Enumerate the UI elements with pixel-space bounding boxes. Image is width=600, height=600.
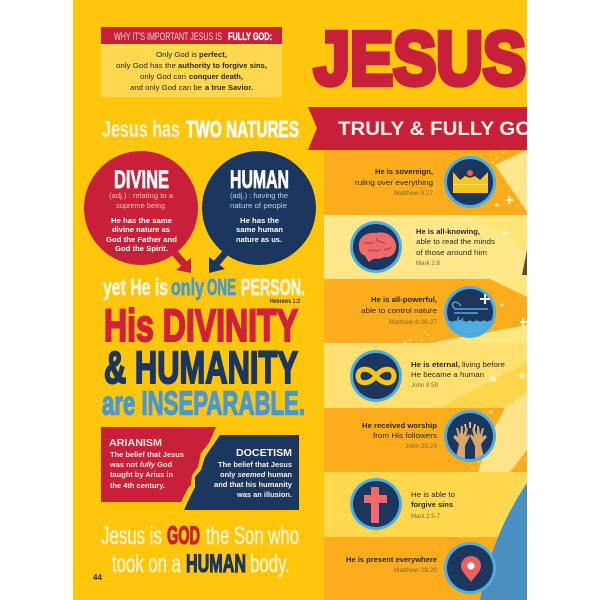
closing statement: HUMAN <box>186 550 246 578</box>
icon: brain <box>350 221 402 273</box>
icon: wind and waves <box>444 286 496 340</box>
text: sovereign: Matthew 9:27 <box>394 190 433 197</box>
panel: divine: supreme being <box>116 201 165 210</box>
panel: human: He has the <box>240 216 279 225</box>
text: all-knowing: Mark 2:8 <box>416 260 440 267</box>
item: all-powerful <box>361 286 496 340</box>
heading: are inseparable: are INSEPARABLE. <box>102 384 305 422</box>
closing statement <box>101 522 299 578</box>
closing statement: the Son who <box>206 522 299 550</box>
panel: docetism: and that his humanity <box>214 480 293 489</box>
page number: 44 <box>93 573 102 582</box>
heading: and humanity: & HUMANITY <box>104 342 298 393</box>
panel: divine: DIVINE <box>114 166 169 194</box>
item: worship <box>362 410 496 462</box>
panel: docetism: only seemed human <box>220 470 292 479</box>
heading: why it's important <box>114 32 272 40</box>
text: reasons: authority to forgive sins, <box>178 61 267 70</box>
icon: cross <box>350 478 402 530</box>
text: eternal: living before <box>462 360 505 369</box>
closing statement: took on a <box>112 550 181 578</box>
text: forgive: forgive sins <box>411 500 453 509</box>
text: reasons: a true Savior. <box>205 83 253 92</box>
heading: two natures <box>102 120 299 138</box>
text: worship: John 20:28 <box>405 443 437 450</box>
text: worship <box>362 422 437 448</box>
icon: map pin <box>444 542 496 594</box>
text: all-knowing <box>416 227 495 267</box>
panel: human: (adj.) : having the <box>230 191 288 200</box>
closing statement: Jesus is <box>101 522 162 550</box>
icon: infinity <box>350 350 402 402</box>
banner: truly and fully god <box>308 107 546 150</box>
text: all-knowing: able to read the minds <box>416 237 495 246</box>
text: sovereign <box>356 168 433 195</box>
blue curved shape <box>480 483 527 600</box>
heading: one person: ONE <box>207 274 236 300</box>
panel: arianism: was not fully God <box>109 460 172 469</box>
heading: one person: only <box>171 274 204 300</box>
text: eternal: John 8:58 <box>411 382 438 389</box>
panel: divine <box>84 151 198 273</box>
panel: divine: He has the same <box>111 216 172 225</box>
banner: truly and fully god: TRULY & FULLY GOD <box>338 119 546 140</box>
heading: his divinity: His DIVINITY <box>104 300 298 351</box>
text: forgive: Mark 2:5-7 <box>411 513 440 520</box>
text: forgive: He is able to <box>411 490 455 499</box>
panel: human: HUMAN <box>230 166 289 194</box>
panel: docetism: The belief that Jesus <box>218 460 292 469</box>
text: eternal: He is eternal, <box>411 360 460 369</box>
panel: arianism: ARIANISM <box>109 438 162 449</box>
closing statement: GOD <box>167 522 200 550</box>
text: reasons: only God has the <box>116 61 176 70</box>
panel: striped background bands <box>324 150 527 600</box>
panel: why it's important <box>101 27 282 97</box>
panel: arianism: The belief that Jesus <box>110 450 184 459</box>
text: present: He is present everywhere <box>346 555 437 564</box>
panel: divine: divine nature as <box>112 225 170 234</box>
text: present: Matthew 28:20 <box>394 567 437 574</box>
heading: why it's important: WHY IT'S IMPORTANT JESUS IS <box>114 31 222 43</box>
item: forgive <box>350 478 455 530</box>
text: reasons: perfect, <box>199 50 227 59</box>
panel: human <box>202 151 316 273</box>
heading: why it's important: FULLY GOD: <box>228 31 272 43</box>
panel: divine: (adj.) : relating to a <box>109 191 174 200</box>
text: all-knowing: of those around him <box>416 248 487 257</box>
text: eternal <box>411 362 505 387</box>
text: reasons: and only God can be <box>130 83 202 92</box>
panel: arianism <box>101 427 216 502</box>
item: sovereign <box>355 156 496 208</box>
panel: human: nature as us. <box>236 235 282 244</box>
text: all-powerful: able to control nature <box>361 306 437 315</box>
speckle texture <box>404 152 517 471</box>
reference: Hebrews: Hebrews 1:3 <box>270 299 301 305</box>
panel: docetism <box>184 435 299 510</box>
panel: divine: God the Father and <box>106 235 177 244</box>
heading: one person: yet He is <box>103 274 168 300</box>
icon: raised hands <box>444 410 496 462</box>
text: eternal: He became a human <box>411 370 484 379</box>
panel: human: nature of people <box>230 201 287 210</box>
text: reasons: conquer death, <box>189 72 243 81</box>
page background <box>73 0 546 600</box>
text: all-powerful: Matthew 8:26-27 <box>389 319 437 326</box>
heading: one person <box>102 278 304 300</box>
text: sovereign: ruling over everything <box>355 178 433 187</box>
panel: human: same human <box>236 225 283 234</box>
text: reasons: Only God is <box>156 50 197 59</box>
icon: crown <box>444 156 496 208</box>
text: present <box>346 555 437 574</box>
text: forgive <box>411 490 455 520</box>
text: all-powerful <box>361 296 437 324</box>
text: reasons: only God can <box>140 72 186 81</box>
text: all-knowing: He is all-knowing, <box>416 227 480 236</box>
text: all-powerful: He is all-powerful, <box>371 295 437 304</box>
text: reasons <box>116 50 267 92</box>
brown shape at right edge <box>522 250 527 275</box>
heading: two natures: TWO NATURES <box>186 116 299 142</box>
sparkles <box>490 196 527 414</box>
heading: two natures: Jesus has <box>102 116 180 142</box>
heading: one person: PERSON. <box>241 274 305 300</box>
panel: docetism: was an illusion. <box>236 490 292 499</box>
item: eternal <box>350 350 505 402</box>
text: sovereign: He is sovereign, <box>375 167 433 176</box>
title: JESUS: JESUS <box>314 16 526 100</box>
item: all-knowing <box>350 221 495 273</box>
panel: arianism: taught by Arius in <box>110 470 173 479</box>
panel: docetism: DOCETISM <box>236 448 292 459</box>
closing statement: body. <box>250 550 290 578</box>
panel: divine: God the Spirit. <box>115 244 168 253</box>
item: present <box>346 542 496 594</box>
panel: arianism: the 4th century. <box>110 481 165 490</box>
text: worship: He received worship <box>362 421 437 430</box>
text: worship: from His followers <box>373 431 437 440</box>
